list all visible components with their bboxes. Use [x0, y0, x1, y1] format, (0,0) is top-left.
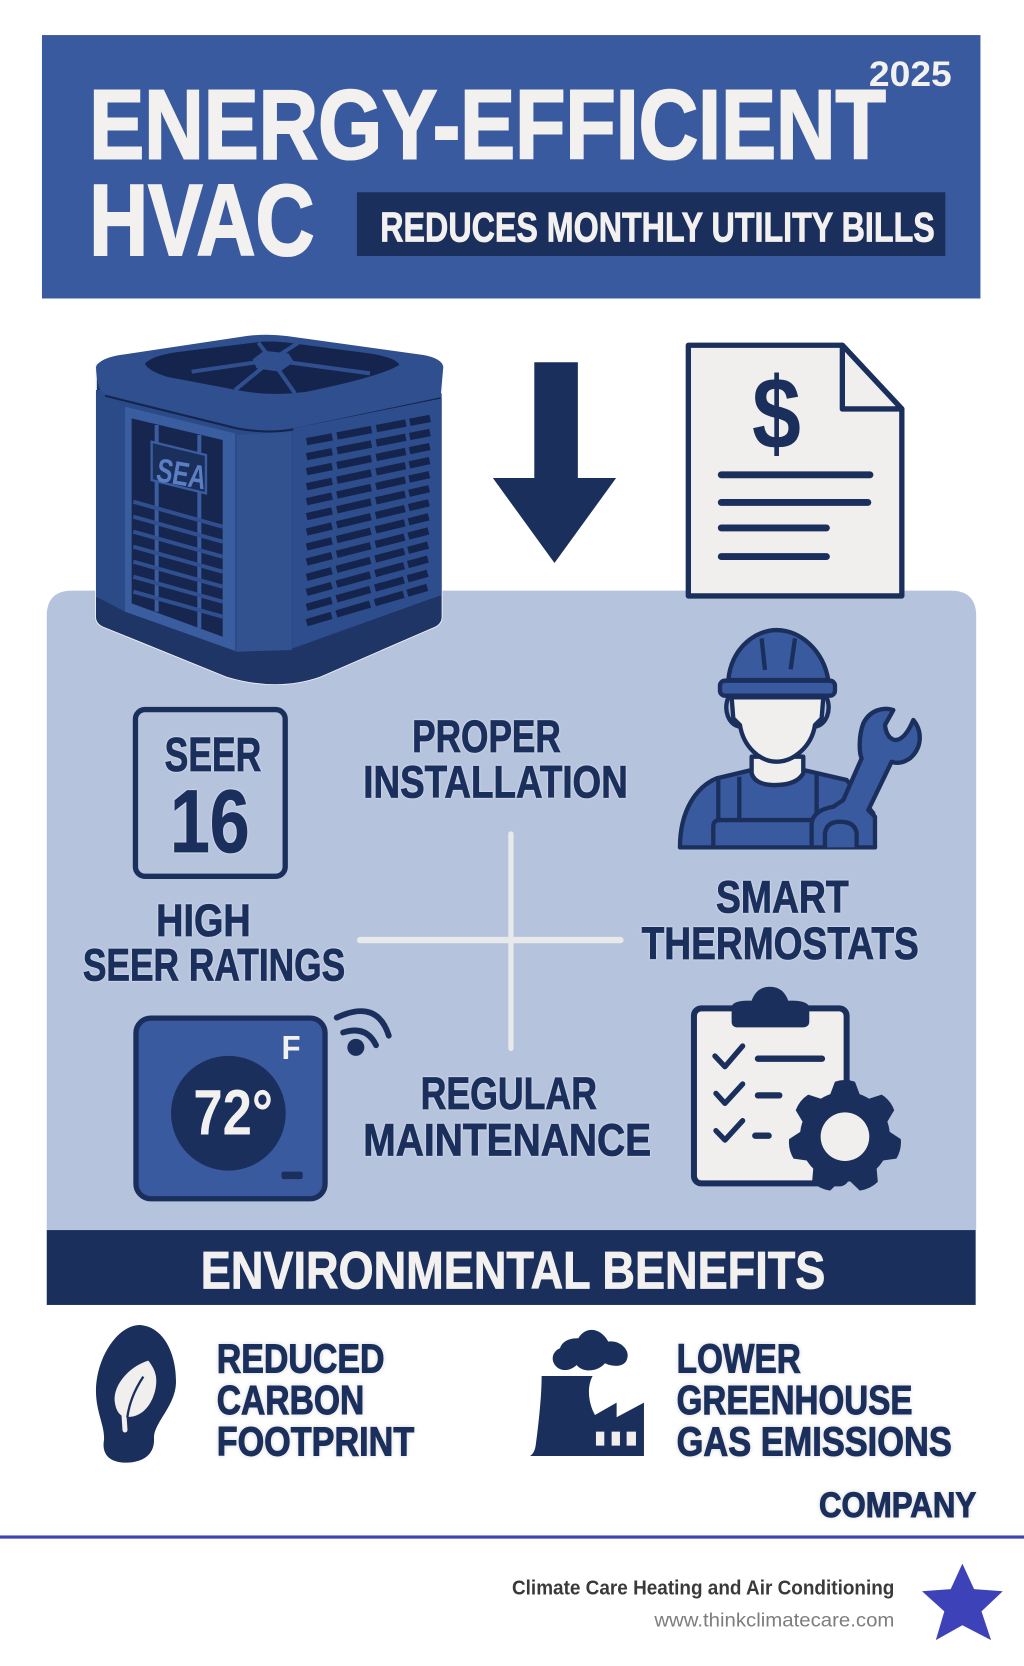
title line 1: ENERGY-EFFICIENT — [89, 69, 886, 179]
label: company: COMPANY — [819, 1486, 976, 1525]
label: reduced carbon footprint: REDUCED — [217, 1335, 385, 1381]
label: lower greenhouse gas emissions: GAS EMISSIONS — [677, 1418, 952, 1464]
icon: gear — [786, 1080, 904, 1194]
icon: air conditioner unit: SEA — [154, 452, 209, 497]
icon: wifi — [337, 1011, 389, 1056]
label: high SEER ratings: SEER RATINGS — [83, 939, 345, 990]
cross divider — [360, 834, 620, 1048]
label: reduced carbon footprint: FOOTPRINT — [217, 1418, 415, 1464]
subtitle bar — [357, 192, 945, 256]
footer company text: Climate Care Heating and Air Conditioning — [512, 1576, 894, 1599]
label: lower greenhouse gas emissions: LOWER — [677, 1335, 801, 1381]
environmental benefits band — [47, 1230, 976, 1305]
label: regular maintenance: MAINTENANCE — [363, 1115, 651, 1166]
label: regular maintenance: REGULAR — [421, 1068, 597, 1119]
label: proper installation — [363, 711, 628, 808]
icon: SEER 16 badge — [135, 710, 285, 876]
icon: logo star — [922, 1564, 1003, 1640]
icon: smart thermostat — [136, 1011, 389, 1199]
icon: SEER 16 badge: SEER — [165, 729, 261, 782]
icon: maintenance checklist with gear — [694, 987, 904, 1194]
header banner — [42, 35, 980, 298]
icon: smart thermostat: 72° — [193, 1076, 273, 1148]
icon: technician with wrench — [680, 630, 920, 847]
arrow: down — [493, 362, 616, 563]
icon: factory with smoke — [530, 1330, 644, 1456]
label: proper installation: PROPER — [412, 711, 561, 762]
icon: carbon footprint leaf — [96, 1325, 176, 1463]
label: high SEER ratings: HIGH — [156, 895, 251, 946]
label: smart thermostats: SMART — [716, 871, 849, 922]
label: regular maintenance — [363, 1068, 651, 1166]
footer company text: www.thinkclimatecare.com — [653, 1609, 894, 1631]
icon: smart thermostat: F — [281, 1029, 301, 1066]
label: high SEER ratings — [83, 895, 345, 990]
label: smart thermostats: THERMOSTATS — [642, 918, 919, 969]
dollar sign: $ — [752, 356, 801, 470]
title line 2: HVAC — [89, 165, 314, 277]
environmental benefits band: ENVIRONMENTAL BENEFITS — [201, 1241, 825, 1300]
label: reduced carbon footprint — [217, 1335, 415, 1464]
icon: SEER 16 badge: 16 — [170, 771, 250, 871]
label: smart thermostats — [642, 871, 919, 969]
bill lines — [721, 475, 870, 557]
label: reduced carbon footprint: CARBON — [217, 1377, 364, 1423]
icon: air conditioner unit — [96, 335, 443, 684]
light blue panel — [47, 591, 976, 1230]
label: lower greenhouse gas emissions: GREENHOUSE — [677, 1377, 912, 1423]
label: lower greenhouse gas emissions — [677, 1335, 952, 1464]
label: proper installation: INSTALLATION — [363, 757, 628, 808]
footer company text — [512, 1576, 894, 1631]
icon: utility bill — [688, 345, 902, 596]
year: 2025 — [869, 55, 952, 94]
